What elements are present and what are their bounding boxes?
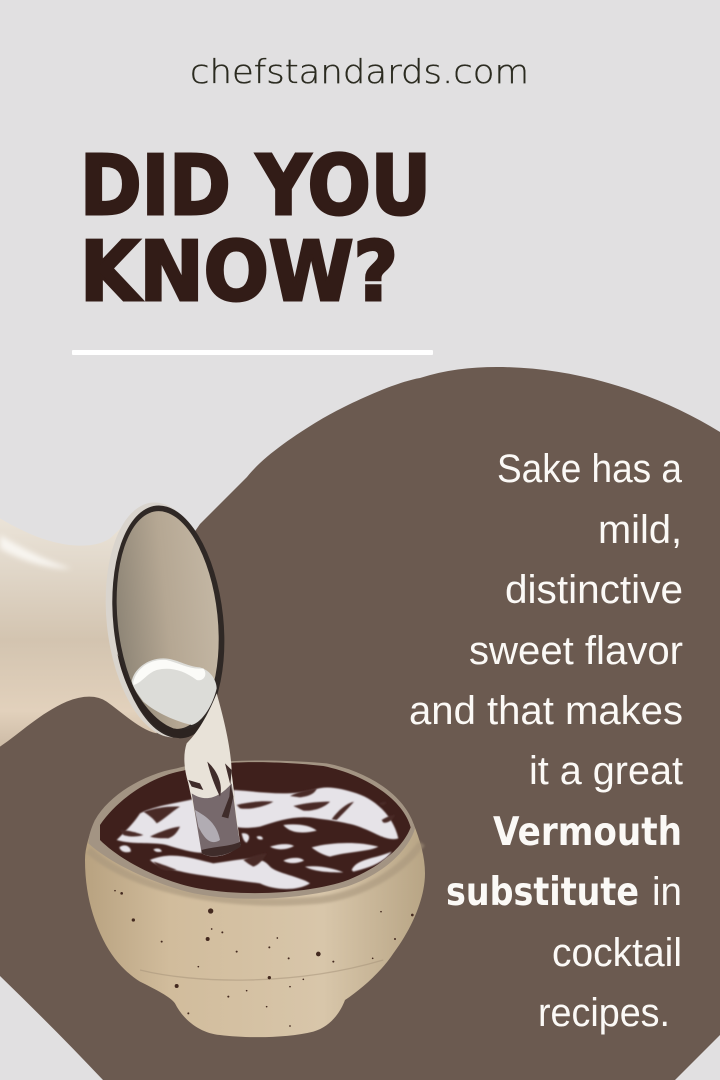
body text: Sake has a [497,447,683,491]
bowl foot groove [140,960,383,980]
clay speckles [114,890,414,1027]
bowl interior [100,762,411,893]
body text: in [652,870,682,914]
brown blob panel [0,367,720,1080]
title: DID YOU [80,139,431,234]
body text: mild, [598,508,682,552]
stream top pale section [184,693,241,856]
body text: distinctive [505,568,683,612]
jug highlight [0,535,72,569]
dark ripples [120,788,395,871]
body text: substitute [446,870,639,915]
body text: Vermouth [493,810,682,855]
stream glints [195,810,220,842]
bowl shadow under the rim [88,843,422,902]
jug body [0,510,157,747]
rippling water highlights [117,788,398,889]
body text: recipes. [538,991,670,1035]
body text: and that makes [409,689,683,733]
title: KNOW? [80,225,398,320]
body text: cocktail [552,931,682,975]
body text: it a great [529,749,683,793]
illustration: sake bowl [85,761,425,1037]
bowl rim [88,761,415,899]
body text [409,447,683,1035]
title [80,139,431,320]
jug rim [95,497,233,743]
white divider line [72,350,433,355]
jug inner surface [107,506,229,734]
stream dark creases [188,762,241,856]
website name: chefstandards.com [190,52,529,91]
bowl body [85,820,425,1037]
pouring stream [184,693,241,856]
liquid crest highlight [133,660,205,685]
illustration: sake jug [0,497,235,747]
stream lower translucent section [192,783,241,856]
jug dark rim edge [101,500,235,743]
liquid in the jug [132,658,217,725]
body text: sweet flavor [469,629,683,673]
thick dark lower rim [117,653,212,738]
